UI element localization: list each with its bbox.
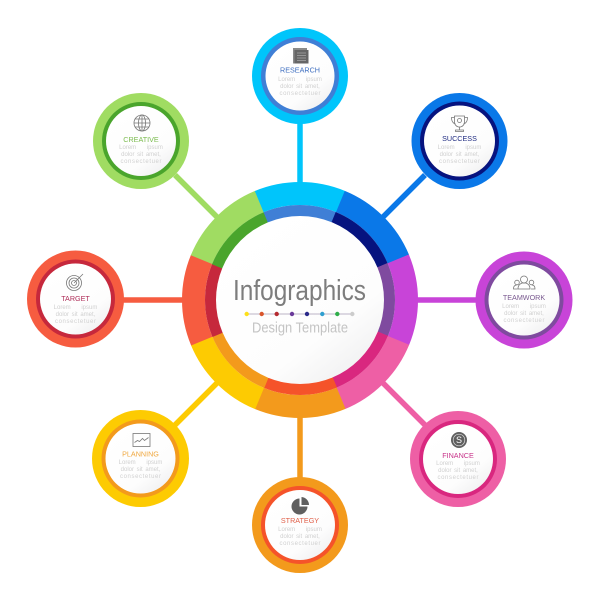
node: target <box>27 250 124 348</box>
body text <box>438 145 481 165</box>
label: planning: PLANNING <box>122 450 159 458</box>
subtitle: Design Template: Design Template <box>252 320 348 336</box>
dotted timeline <box>244 312 354 316</box>
body text: consectetuer <box>55 319 96 325</box>
body text <box>54 305 97 325</box>
connector: success <box>380 175 425 220</box>
body text: consectetuer <box>120 159 162 165</box>
title: Infographics: Infographics <box>233 275 366 307</box>
connector: teamwork <box>410 297 480 303</box>
body text: Lorem ipsum <box>502 304 546 310</box>
node: strategy <box>252 477 348 573</box>
body text: Lorem ipsum <box>278 527 322 533</box>
label: teamwork: TEAMWORK <box>503 293 545 302</box>
body text <box>278 527 322 547</box>
body text: dolor sit amet, <box>56 312 96 318</box>
body text <box>119 460 162 480</box>
body text: dolor sit amet, <box>280 84 320 90</box>
body text <box>502 304 546 324</box>
connector: strategy <box>297 410 303 480</box>
hub segment: finance <box>161 161 439 439</box>
body text: Lorem ipsum <box>438 145 481 151</box>
central hub ring <box>161 161 439 439</box>
connector: creative <box>175 175 220 220</box>
body text: Lorem ipsum <box>54 305 97 311</box>
icon: target <box>66 274 83 290</box>
central white disc <box>216 216 384 384</box>
label: success: SUCCESS <box>442 134 477 143</box>
body text: Lorem ipsum <box>436 461 480 467</box>
connector: planning <box>175 380 220 425</box>
body text: dolor sit amet, <box>121 152 161 158</box>
body text: dolor sit amet, <box>438 468 478 474</box>
connector: research <box>297 120 303 190</box>
body text: Lorem ipsum <box>119 460 162 466</box>
body text: dolor sit amet, <box>504 311 544 317</box>
body text: consectetuer <box>280 541 320 547</box>
node: success <box>412 93 508 189</box>
node: planning <box>92 410 189 507</box>
label: creative: CREATIVE <box>123 135 159 144</box>
icon: book <box>293 48 308 64</box>
node: teamwork <box>476 252 572 348</box>
hub segment: research <box>161 161 439 439</box>
icon: coin: S <box>456 435 462 445</box>
label: research: RESEARCH <box>280 66 320 74</box>
hub segment: success <box>161 161 439 439</box>
body text: consectetuer <box>120 474 161 480</box>
body text: dolor sit amet, <box>121 467 161 473</box>
icon: globe <box>134 115 150 131</box>
body text: consectetuer <box>280 91 320 97</box>
label: strategy: STRATEGY <box>281 516 319 525</box>
node: creative <box>93 93 189 189</box>
icon: line chart <box>133 434 150 446</box>
node: research <box>252 28 348 124</box>
node: finance <box>410 411 506 507</box>
hub segment: strategy <box>161 161 439 439</box>
connector: finance <box>380 380 425 425</box>
hub segment: planning <box>161 161 439 439</box>
label: finance: FINANCE <box>442 451 474 460</box>
body text: dolor sit amet, <box>440 152 480 158</box>
body text: consectetuer <box>439 159 480 165</box>
body text: Lorem ipsum <box>119 145 163 151</box>
hub segment: creative <box>161 161 439 439</box>
body text: Lorem ipsum <box>278 77 322 83</box>
body text: consectetuer <box>438 475 478 481</box>
body text <box>278 77 322 97</box>
icon: pie chart <box>292 497 309 514</box>
body text <box>119 145 163 165</box>
connectors from hub to nodes <box>120 120 480 480</box>
connector: target <box>120 297 190 303</box>
icon: trophy <box>452 116 468 132</box>
hub segment: teamwork <box>161 161 439 439</box>
body text: consectetuer <box>504 318 544 324</box>
body text <box>436 461 480 481</box>
label: target: TARGET <box>61 294 90 303</box>
icon: people <box>514 276 535 289</box>
body text: dolor sit amet, <box>280 534 320 540</box>
hub segment: target <box>161 161 439 439</box>
